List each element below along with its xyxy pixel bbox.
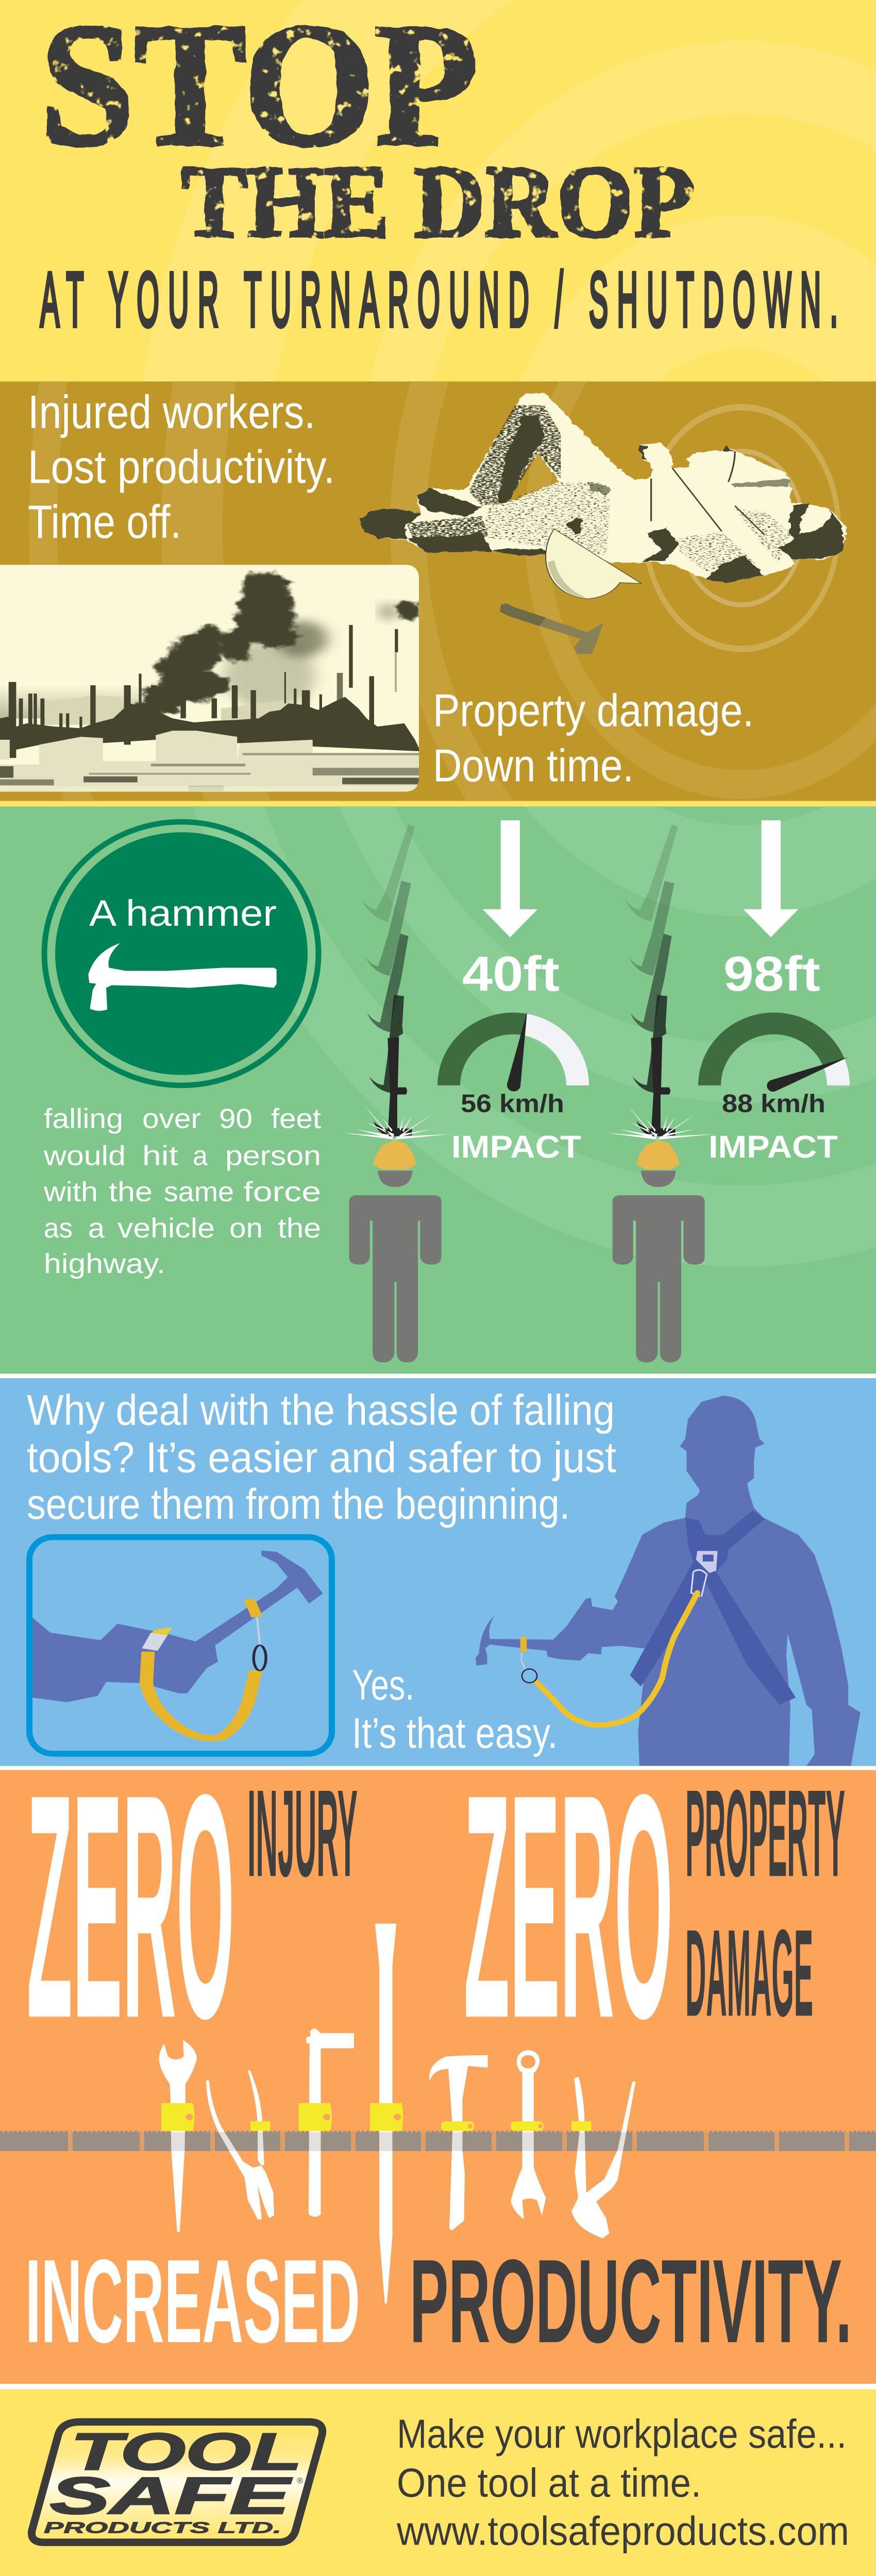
harness d-ring [696, 1551, 718, 1573]
icon: worker body [349, 1195, 442, 1362]
gauge: 56 km/h [437, 1011, 589, 1091]
text: falling over 90 feet paragraph: highway. [44, 1248, 165, 1279]
title: THE DROP: THE DROP [181, 145, 694, 259]
harness straps [630, 1510, 796, 1705]
text: it's that easy: It’s that easy. [352, 1709, 558, 1757]
worker shirt shading [482, 482, 791, 578]
arrow: 98ft drop [744, 820, 798, 937]
icon: falling hammer sequence [344, 824, 450, 1187]
logo: tool safe products: ® [297, 2477, 303, 2485]
text: falling over 90 feet paragraph: a [88, 1212, 105, 1244]
figure: falling hammer and worker, 40ft [344, 824, 450, 1362]
panel: secure your tools [0, 1378, 876, 1766]
inset wrist buckle [142, 1633, 167, 1651]
icon: chisel [375, 1924, 396, 2303]
icon: falling hammer sequence [607, 824, 714, 1187]
logo: tool safe products [31, 2422, 323, 2543]
text: one tool at a time: One tool at a time. [397, 2461, 701, 2506]
text: injured workers: Injured workers. [28, 385, 315, 438]
icon: impact sparks [344, 1106, 450, 1140]
panel: zero injury, zero property damage [0, 1728, 876, 2384]
icon: socket ratchet [306, 2028, 354, 2217]
text: why deal with the hassle [27, 1386, 616, 1529]
refinery skyline [0, 625, 420, 758]
yellow clamps [161, 2103, 591, 2131]
inset frame [29, 1537, 332, 1754]
logo: tool safe products: TOOL [71, 2422, 302, 2481]
icon: worker body [613, 1195, 705, 1362]
text: falling over 90 feet paragraph: 90 [219, 1103, 252, 1134]
label: 56 km/h: 56 km/h [461, 1090, 564, 1117]
worker trouser shading [406, 405, 561, 538]
text: why deal with the hassle: secure them from the beginning. [27, 1481, 570, 1529]
icon: open-end wrench [159, 2040, 197, 2232]
carabiner [691, 1570, 707, 1597]
photo: injured worker lying down [360, 393, 847, 599]
lanyard tab on hammer [520, 1636, 527, 1652]
label: 98ft: 98ft [723, 946, 820, 1002]
label: 40ft: 40ft [462, 946, 560, 1002]
icon: worker head [641, 1171, 676, 1187]
panel: footer [0, 2389, 876, 2576]
text: why deal with the hassle: tools? It’s easier and safer to just [27, 1434, 616, 1482]
panel: hammer impact [0, 806, 876, 1374]
text: falling over 90 feet paragraph: would [43, 1140, 126, 1171]
text: falling over 90 feet paragraph: same [164, 1176, 234, 1207]
text: falling over 90 feet paragraph: as [44, 1212, 73, 1244]
icon: claw hammer [429, 2055, 488, 2231]
text: falling over 90 feet paragraph: with [43, 1176, 98, 1207]
smoke plumes [127, 572, 420, 725]
silhouette: hand and hammer [28, 1551, 323, 1702]
icon: worker head [378, 1171, 413, 1187]
rail overlay on tools [0, 2132, 876, 2151]
text: falling over 90 feet paragraph: on [229, 1212, 263, 1244]
lanyard [537, 1593, 697, 1725]
divider band: white [0, 2384, 876, 2389]
text: falling over 90 feet paragraph: feet [271, 1103, 321, 1134]
storage tanks and ground [39, 737, 103, 765]
label: impact left: IMPACT [451, 1129, 581, 1165]
icon: white hammer [88, 943, 277, 1011]
logo: tool safe products: SAFE [50, 2467, 293, 2524]
icon: channel lock pliers [571, 2077, 636, 2239]
label: 88 km/h: 88 km/h [722, 1090, 826, 1117]
logo: tool safe products: PRODUCTS LTD. [44, 2519, 281, 2536]
text: a hammer: A hammer [89, 893, 277, 934]
icon: impact sparks [607, 1106, 714, 1140]
panel: zero injury, zero property damage: INJURY [247, 1764, 358, 1902]
text: falling over 90 feet paragraph: vehicle [117, 1212, 215, 1244]
panel: zero injury, zero property damage: INCREASED [25, 2234, 360, 2367]
text: falling over 90 feet paragraph: the [278, 1212, 321, 1244]
text: falling over 90 feet paragraph: over [142, 1103, 201, 1134]
label: impact right: IMPACT [709, 1129, 838, 1165]
rail with tools [0, 1924, 876, 2303]
text: down time: Down time. [433, 740, 634, 791]
icon: yellow hard hat [636, 1140, 680, 1170]
text: lost productivity: Lost productivity. [28, 440, 335, 493]
text: why deal with the hassle: Why deal with the hassle of falling [27, 1386, 615, 1434]
divider band: yellow [0, 801, 876, 806]
figure: worker silhouette with harness and lanyard [476, 1396, 861, 1766]
inset: hand holding tethered hammer [28, 1537, 332, 1754]
text: property damage: Property damage. [433, 685, 754, 736]
divider band: white [0, 1766, 876, 1770]
icon: yellow hard hat [373, 1140, 416, 1170]
silhouette: worker [476, 1396, 861, 1766]
panel: title header [39, 0, 876, 381]
subtitle: at your turnaround / shutdown: AT YOUR TURNAROUND / SHUTDOWN. [40, 257, 838, 342]
inset tab and clip [244, 1599, 263, 1618]
arrow: 40ft drop [483, 820, 537, 937]
gauge: 88 km/h [698, 1012, 850, 1092]
icon: combination wrench [511, 2050, 546, 2219]
worker boots, hair and deep shadows [360, 415, 844, 583]
photo: refinery on fire [0, 565, 420, 792]
inset lanyard [146, 1652, 256, 1738]
text: falling over 90 feet paragraph: a [193, 1140, 208, 1171]
icon: pliers [206, 2070, 274, 2219]
text: falling over 90 feet paragraph: person [225, 1140, 321, 1171]
text: falling over 90 feet paragraph: hit [142, 1140, 178, 1171]
text: time off: Time off. [28, 496, 181, 548]
figure: falling hammer and worker, 98ft [607, 824, 714, 1362]
text: falling over 90 feet paragraph: force [243, 1176, 321, 1207]
text: falling over 90 feet paragraph [43, 1103, 321, 1279]
icon: green circle badge [44, 822, 318, 1086]
photo: hammer on ground [500, 603, 603, 654]
text: yes: Yes. [352, 1662, 414, 1709]
divider band: white [0, 1374, 876, 1378]
panel: consequences [0, 381, 876, 801]
text: falling over 90 feet paragraph: the [109, 1176, 153, 1207]
text: falling over 90 feet paragraph: falling [44, 1103, 123, 1134]
